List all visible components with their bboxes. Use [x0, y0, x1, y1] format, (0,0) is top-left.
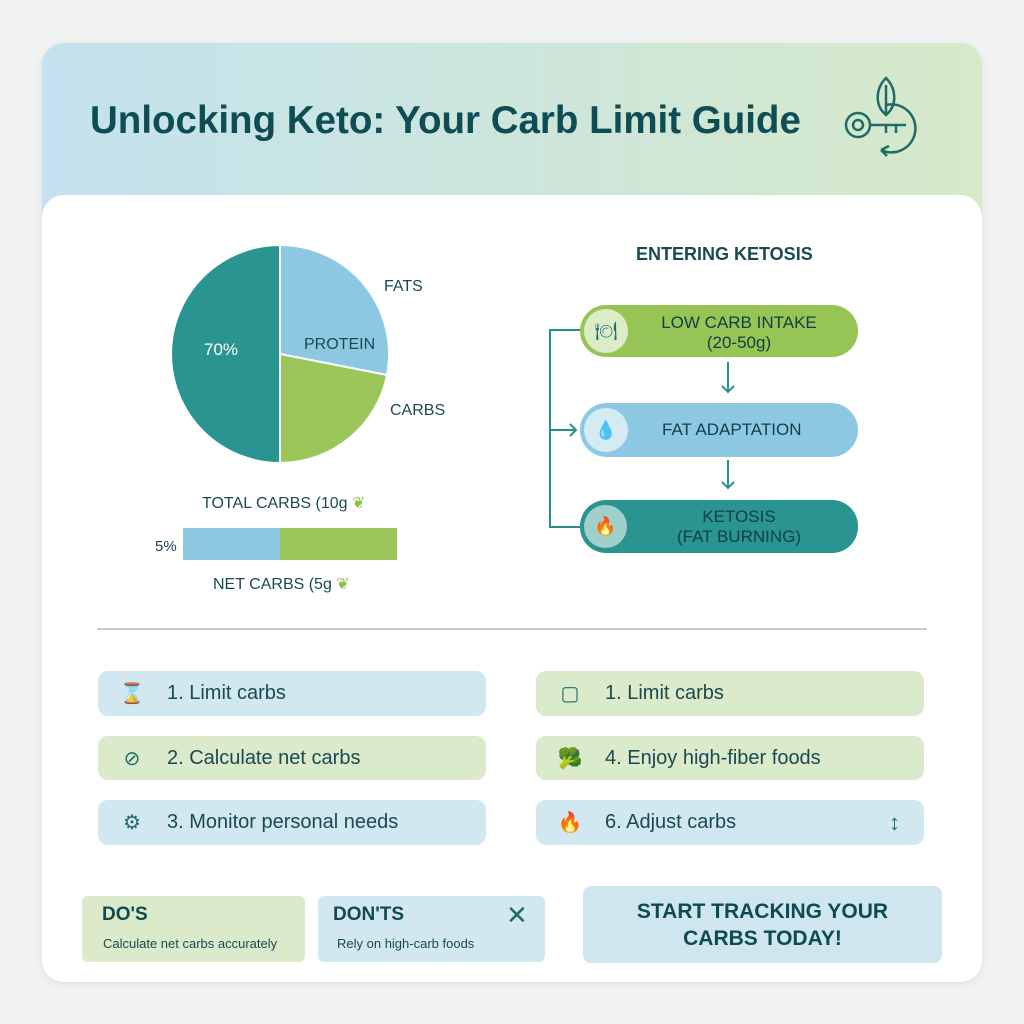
step: low carb: LOW CARB INTAKE [661, 313, 817, 332]
step: low carb: (20-50g) [707, 333, 771, 352]
title: Unlocking Keto: Your Carb Limit Guide [90, 99, 801, 142]
heading: entering ketosis: ENTERING KETOSIS [636, 244, 813, 264]
don'ts [318, 896, 545, 962]
carbs bar: NET CARBS (5g ❦ [213, 576, 350, 593]
text: 3. Monitor personal needs [167, 811, 398, 833]
don'ts: DON'TS [333, 904, 404, 925]
step: ketosis [580, 500, 858, 553]
text: 2. Calculate net carbs [167, 746, 360, 768]
carbs bar [155, 495, 397, 593]
flow connectors [549, 329, 735, 528]
carbs bar: TOTAL CARBS (10g ❦ [202, 495, 365, 512]
step: fat adaptation [580, 403, 858, 457]
text: 4. Enjoy high-fiber foods [605, 746, 821, 768]
text: ▢ [561, 683, 579, 705]
CTA: CARBS TODAY! [683, 927, 842, 950]
text: 🔥 [558, 812, 582, 834]
don'ts: ✕ [506, 900, 528, 930]
step: ketosis: KETOSIS [702, 507, 776, 526]
text: CARBS [390, 402, 445, 419]
tip rows [98, 671, 486, 716]
tip rows: 1. Limit carbs [167, 682, 286, 704]
don'ts: Rely on high-carb foods [337, 936, 474, 951]
carbs bar: 5% [155, 538, 177, 555]
tip rows: ⌛ [120, 683, 144, 705]
pie chart [172, 246, 388, 462]
do's [82, 896, 305, 962]
text: 6. Adjust carbs [605, 811, 736, 833]
text: ⊘ [124, 748, 140, 770]
step: fat adaptation: FAT ADAPTATION [662, 420, 802, 439]
pie chart: PROTEIN [304, 336, 375, 353]
CTA [583, 886, 942, 963]
step: low carb: 🍽 [595, 321, 617, 341]
text: 🥦 [558, 748, 582, 770]
step: low carb [580, 305, 858, 357]
pie chart: 70% [204, 340, 238, 359]
step: ketosis: 🔥 [594, 516, 617, 536]
step: ketosis: (FAT BURNING) [677, 527, 801, 546]
do's: DO'S [102, 904, 148, 925]
step: fat adaptation: 💧 [595, 420, 617, 440]
text: 1. Limit carbs [605, 682, 724, 704]
pie labels: FATS [384, 278, 423, 295]
do's: Calculate net carbs accurately [103, 936, 277, 951]
text: ↕ [889, 810, 900, 834]
text: ⚙ [123, 812, 141, 834]
CTA: START TRACKING YOUR [637, 900, 888, 923]
icon: key leaf [844, 76, 917, 157]
